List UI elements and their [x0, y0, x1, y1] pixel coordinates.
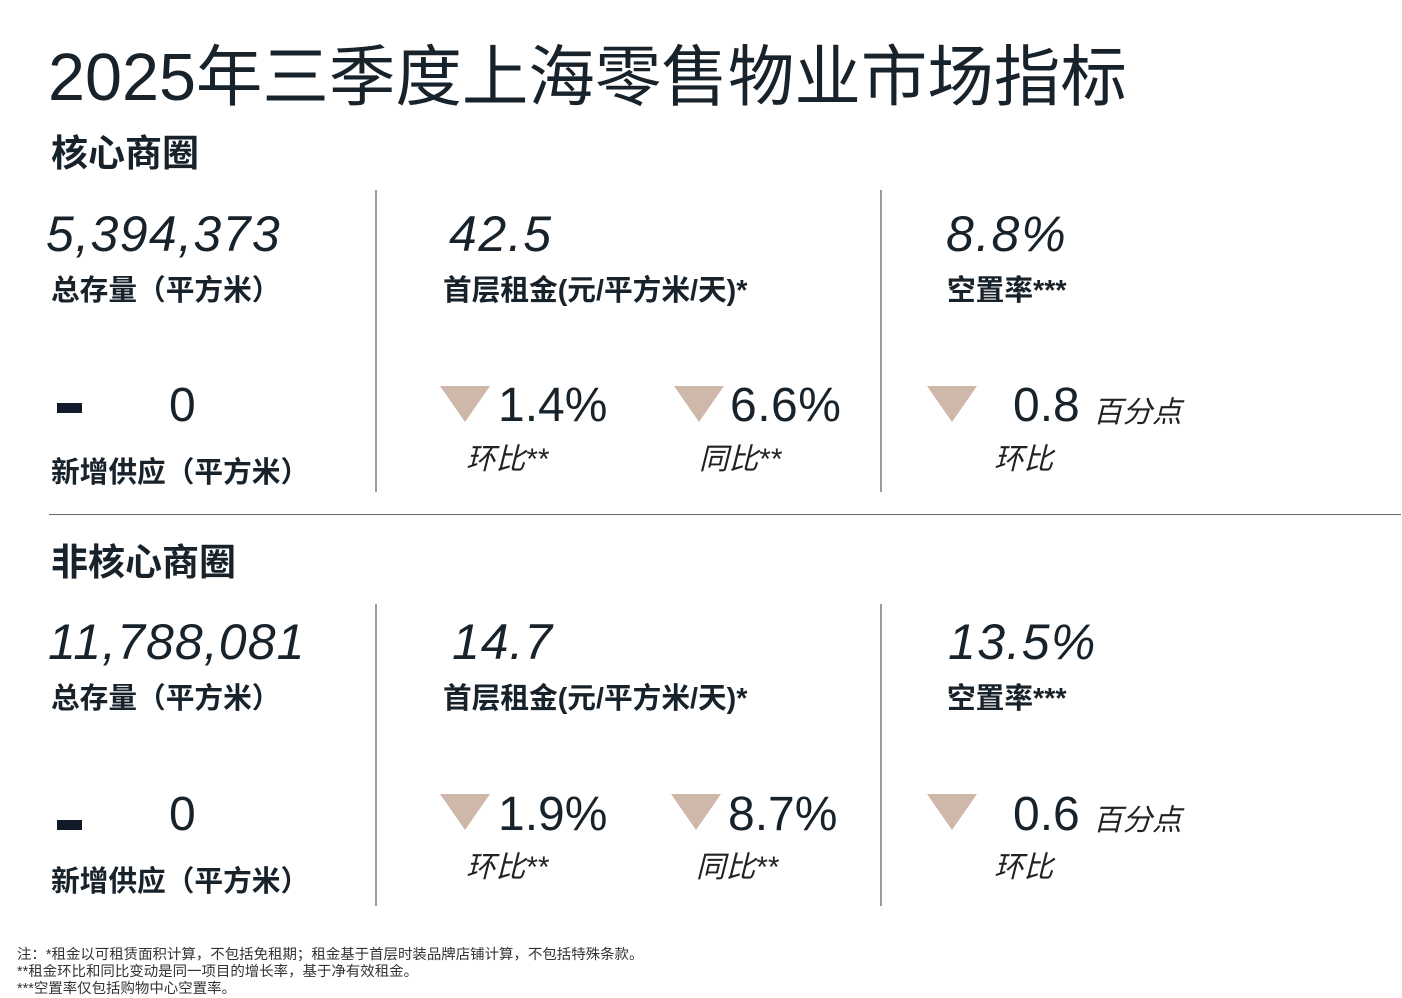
non-core: rent yoy label: 同比**	[696, 851, 778, 884]
core: supply value: 0	[169, 379, 196, 432]
core: rent qoq label: 环比**	[466, 443, 548, 476]
divider	[880, 604, 882, 906]
non-core: rent yoy value: 8.7%	[728, 788, 837, 841]
core: rent: 42.5	[449, 206, 553, 262]
footnotes: ***空置率仅包括购物中心空置率。	[17, 981, 236, 997]
non-core: vacancy arrow	[927, 794, 977, 830]
core: vacancy arrow	[927, 386, 977, 422]
non-core: rent qoq value: 1.9%	[498, 788, 607, 841]
non-core: supply label: 新增供应（平方米）	[51, 866, 309, 898]
core: vacancy: 8.8%	[946, 206, 1068, 262]
core: rent yoy arrow	[674, 386, 724, 422]
core: rent yoy value: 6.6%	[730, 379, 841, 432]
non-core: vacancy unit: 百分点	[1093, 804, 1182, 837]
non-core: vacancy value: 0.6	[1013, 788, 1080, 841]
non-core: rent yoy arrow	[671, 794, 721, 830]
footnotes: 注：*租金以可租赁面积计算，不包括免租期；租金基于首层时装品牌店铺计算，不包括特殊条款。	[17, 947, 643, 963]
core: supply dash	[57, 403, 82, 413]
non-core: rent: 14.7	[452, 614, 553, 670]
non-core: vacancy qoq label: 环比	[994, 851, 1053, 884]
core: vacancy qoq label: 环比	[994, 443, 1053, 476]
title: 2025年三季度上海零售物业市场指标	[48, 41, 1127, 115]
non-core: rent label: 首层租金(元/平方米/天)*	[443, 683, 747, 715]
non-core: rent qoq label: 环比**	[466, 851, 548, 884]
non-core: rent qoq arrow	[440, 794, 490, 830]
footnotes: **租金环比和同比变动是同一项目的增长率，基于净有效租金。	[17, 964, 418, 980]
non-core: supply value: 0	[169, 788, 196, 841]
non-core: vacancy: 13.5%	[948, 614, 1097, 670]
non-core: total stock: 11,788,081	[48, 614, 306, 670]
core: rent qoq value: 1.4%	[498, 379, 607, 432]
non-core: vacancy label: 空置率***	[947, 683, 1067, 715]
divider	[375, 190, 377, 492]
divider	[49, 514, 1401, 515]
non-core: stock label: 总存量（平方米）	[51, 683, 280, 715]
core: rent qoq arrow	[440, 386, 490, 422]
core: total stock: 5,394,373	[46, 206, 281, 262]
divider	[880, 190, 882, 492]
footnotes	[17, 946, 643, 997]
non-core: supply dash	[57, 820, 82, 830]
heading: core districts: 核心商圈	[51, 133, 199, 174]
core: vacancy unit: 百分点	[1093, 396, 1182, 429]
divider	[375, 604, 377, 906]
core: vacancy value: 0.8	[1013, 379, 1080, 432]
heading: non-core districts: 非核心商圈	[51, 542, 236, 583]
core: stock label: 总存量（平方米）	[51, 275, 280, 307]
core: rent label: 首层租金(元/平方米/天)*	[443, 275, 747, 307]
core: supply label: 新增供应（平方米）	[51, 457, 309, 489]
core: rent yoy label: 同比**	[699, 443, 781, 476]
core: vacancy label: 空置率***	[947, 275, 1067, 307]
